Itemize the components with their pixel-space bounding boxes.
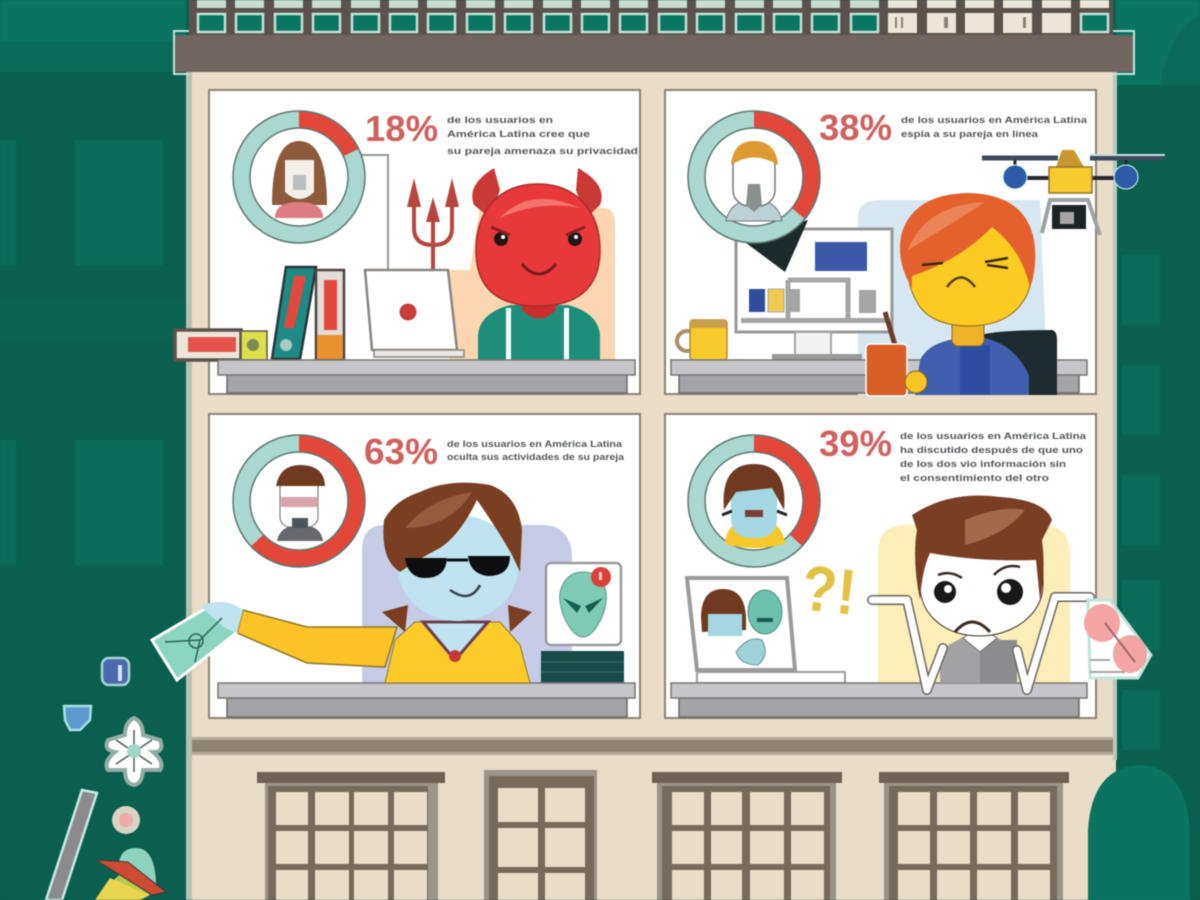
donut chart 39% [688, 435, 820, 567]
green arched tree [1088, 765, 1200, 900]
character: blue person in sunglasses [382, 483, 532, 683]
window 3 [652, 772, 842, 900]
description 39%: de los dos vio información sin [900, 459, 1066, 470]
character: devil [472, 168, 602, 360]
rooftop balustrade [189, 0, 1113, 36]
icon: alien notification [546, 563, 621, 645]
description 39%: ha discutido después de que uno [900, 445, 1083, 456]
pin pointer [742, 220, 808, 272]
description 63%: oculta sus actividades de su pareja [447, 452, 625, 463]
description 39%: de los usuarios en América Latina [900, 431, 1087, 442]
icon: flying saucer [95, 848, 166, 900]
panel: 38% online spying [665, 90, 1165, 396]
blue backdrop [858, 200, 1048, 395]
description 63%: de los usuarios en América Latina [447, 439, 623, 450]
laptop [365, 270, 464, 357]
icon: twitter badge [64, 706, 91, 730]
description 38%: espía a su pareja en línea [901, 129, 1039, 140]
panel: 18% privacy threat [175, 90, 640, 394]
icon: flower [107, 718, 161, 785]
lavender backdrop [362, 525, 572, 683]
horizontal cornice band [192, 737, 1113, 755]
avatar: man with beard [726, 141, 782, 221]
desk [671, 683, 1087, 717]
binder: lying flat [175, 330, 267, 360]
building facade [186, 60, 1117, 900]
description 63% [447, 439, 625, 463]
description 39%: el consentimiento del otro [900, 473, 1049, 484]
panel: 63% hides activities [152, 414, 640, 718]
description 39% [900, 431, 1087, 484]
yellow backdrop [878, 525, 1070, 683]
donut chart 63% [233, 435, 365, 567]
percentage 38%: 38% [819, 107, 892, 148]
roof cornice [174, 31, 1134, 74]
avatar: blue person [722, 464, 787, 548]
description 38%: de los usuarios en América Latina [901, 115, 1088, 126]
character: red-haired spy [866, 193, 1057, 396]
character: confused man [872, 495, 1090, 690]
connector line [322, 155, 388, 270]
tablet edge [46, 790, 97, 900]
icon: facebook badge [102, 658, 129, 685]
arm [237, 610, 397, 667]
description 18%: de los usuarios en [447, 115, 553, 126]
panel: 39% discussion [665, 414, 1151, 718]
description 18%: su pareja amenaza su privacidad [447, 146, 638, 157]
donut chart 18% [233, 111, 365, 243]
percentage 39%: 39% [819, 423, 892, 464]
peach backdrop [449, 208, 615, 360]
binder: teal [272, 267, 316, 359]
desk [218, 683, 635, 717]
description 18% [447, 115, 638, 157]
icon: pink circle badge [112, 806, 140, 834]
binder: orange [316, 270, 344, 360]
window 4 [879, 772, 1069, 900]
description 18%: América Latina cree que [447, 129, 590, 140]
icon: pink glasses [1084, 600, 1151, 678]
avatar: woman [272, 141, 327, 218]
percentage 63%: 63% [364, 431, 438, 472]
pitchfork [407, 178, 459, 270]
percentage 18%: 18% [365, 108, 438, 149]
window 2 [484, 770, 597, 900]
description 38% [901, 115, 1088, 140]
donut chart 38% [688, 111, 820, 243]
desk [671, 360, 1087, 393]
desk [218, 360, 635, 393]
question and exclamation marks: ?! [798, 551, 860, 629]
icon: drone [982, 150, 1165, 235]
envelope in hand [152, 600, 243, 680]
stack of books [541, 651, 624, 684]
monitor with video call [687, 578, 845, 683]
window 1 [257, 772, 445, 900]
computer monitor [736, 229, 892, 360]
icon: coffee mug [677, 320, 727, 360]
avatar: man with glasses [276, 465, 325, 541]
